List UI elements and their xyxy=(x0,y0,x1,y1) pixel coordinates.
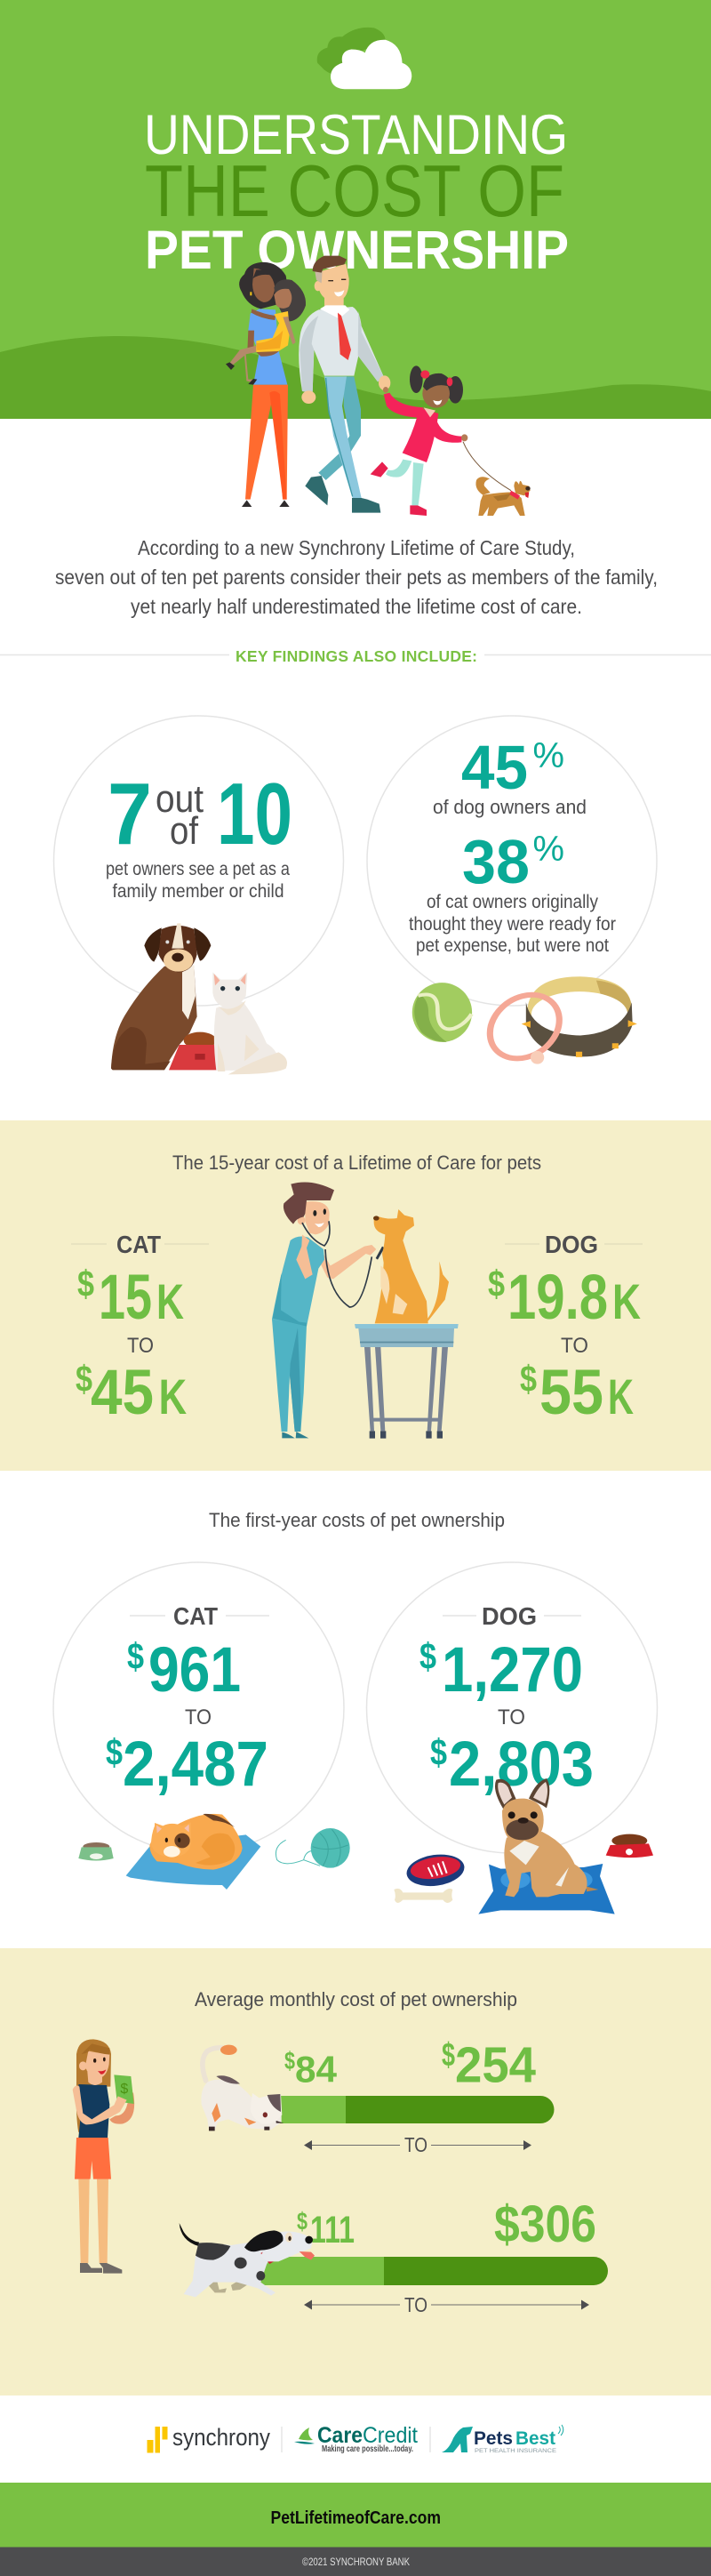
statistic: of xyxy=(170,809,199,853)
dog costs: TO xyxy=(561,1334,588,1358)
panel: first-year costs xyxy=(53,1509,658,1914)
illustration: family walking dog xyxy=(226,256,531,516)
illustration: french bulldog on cushion with toys xyxy=(394,1778,653,1914)
dog first-year circle: DOG xyxy=(482,1602,537,1630)
cat costs xyxy=(71,1231,209,1428)
vet xyxy=(272,1182,385,1438)
hill xyxy=(0,336,711,419)
dog costs: $ xyxy=(488,1263,505,1304)
girl running xyxy=(371,365,467,516)
dog costs: 55 xyxy=(539,1358,603,1428)
dog first-year circle: $ xyxy=(430,1731,447,1773)
heading: The first-year costs of pet ownership xyxy=(209,1509,505,1531)
cat prices: 254 xyxy=(455,2036,536,2093)
illustration: stretching cat xyxy=(201,2045,284,2131)
heading: The 15-year cost of a Lifetime of Care for pets xyxy=(172,1152,541,1174)
statistic: 38 percent: 38 xyxy=(462,827,530,896)
dog costs: K xyxy=(608,1368,634,1424)
statistic xyxy=(108,765,292,863)
dog prices: $306 xyxy=(494,2195,596,2253)
logo: carecredit: Credit xyxy=(363,2423,418,2448)
panel: 45% and 38% xyxy=(367,716,657,1070)
panel: 15-year cost xyxy=(0,1120,711,1471)
logo: synchrony xyxy=(148,2424,270,2452)
copyright bar: ©2021 SYNCHRONY BANK xyxy=(302,2556,410,2568)
dog first-year circle: TO xyxy=(498,1705,525,1729)
logo: carecredit: Care xyxy=(317,2423,363,2448)
cat costs: $ xyxy=(77,1263,94,1304)
statistic: out xyxy=(156,777,204,821)
dog on table xyxy=(373,1209,449,1323)
statistic: 7 xyxy=(108,765,152,863)
statistic: 38 percent: % xyxy=(533,830,564,869)
dog costs xyxy=(488,1231,643,1428)
caption: cat owners: thought they were ready for xyxy=(409,914,616,935)
logo: carecredit xyxy=(294,2423,418,2454)
dog bar xyxy=(260,2257,608,2285)
dog costs: DOG xyxy=(545,1231,598,1258)
logo: synchrony: synchrony xyxy=(172,2424,270,2451)
logo: pets best: Best xyxy=(515,2428,555,2449)
footer band: PetLifetimeofCare.com xyxy=(270,2508,441,2528)
logos xyxy=(148,2423,563,2454)
exam table xyxy=(355,1324,459,1439)
logo: pets best: Pets xyxy=(474,2428,513,2449)
illustration: vet examining dog xyxy=(272,1182,459,1439)
icon: clouds xyxy=(317,28,411,89)
intro paragraph: According to a new Synchrony Lifetime of Care Study, xyxy=(138,536,575,559)
cat first-year circle xyxy=(53,1562,344,1853)
dog costs: $ xyxy=(520,1358,537,1400)
cat range arrow xyxy=(304,2133,531,2156)
illustration: cat on cushion with bowl and yarn xyxy=(78,1814,350,1890)
footer band xyxy=(0,2483,711,2548)
dog range arrow xyxy=(304,2293,589,2316)
hero panel xyxy=(0,0,711,516)
small dog xyxy=(475,477,531,516)
cat costs: 15 xyxy=(99,1263,152,1333)
statistic: 45 percent xyxy=(461,733,564,802)
intro paragraph: seven out of ten pet parents consider their pets as members of the family, xyxy=(55,566,658,589)
caption: dog owners: of dog owners and xyxy=(433,796,587,818)
title: UNDERSTANDING xyxy=(144,104,568,166)
intro paragraph xyxy=(55,536,658,618)
statistic: 45 percent: % xyxy=(533,736,564,775)
dog first-year circle: $ xyxy=(419,1635,436,1677)
dog prices: 111 xyxy=(310,2209,355,2251)
cat range arrow: TO xyxy=(404,2133,427,2156)
cat first-year circle: 961 xyxy=(148,1635,241,1705)
title: THE COST OF xyxy=(145,149,564,232)
caption: family member or child xyxy=(112,881,284,902)
logo: carecredit: Making care possible...today. xyxy=(322,2444,413,2454)
caption: pet owners see a pet as a xyxy=(106,859,290,879)
cat prices: 84 xyxy=(295,2049,338,2090)
cat prices: $ xyxy=(442,2036,455,2073)
cat first-year circle: TO xyxy=(185,1705,212,1729)
intro paragraph: yet nearly half underestimated the lifetime cost of care. xyxy=(131,595,582,618)
heading: Average monthly cost of pet ownership xyxy=(195,1988,517,2010)
cat first-year circle: $ xyxy=(106,1731,123,1773)
statistic: 45 percent: 45 xyxy=(461,733,528,802)
cat costs: CAT xyxy=(116,1231,161,1258)
cat costs: K xyxy=(159,1368,187,1424)
title xyxy=(144,104,569,280)
dog range arrow: TO xyxy=(404,2293,427,2316)
dog first-year circle: 2,803 xyxy=(449,1729,594,1800)
dog first-year circle xyxy=(366,1562,658,1853)
cat costs: TO xyxy=(127,1334,154,1358)
dog prices: $ xyxy=(297,2207,308,2235)
dog first-year circle: 1,270 xyxy=(442,1635,583,1705)
statistic: 10 xyxy=(217,765,292,863)
copyright bar xyxy=(0,2547,711,2576)
key findings heading: KEY FINDINGS ALSO INCLUDE: xyxy=(236,647,477,665)
caption: cat owners: pet expense, but were not xyxy=(416,935,609,956)
caption: cat owners: of cat owners originally xyxy=(427,892,598,912)
illustration: dog and cat xyxy=(111,923,287,1074)
cat prices: $ xyxy=(284,2047,295,2074)
cat costs: $ xyxy=(76,1358,92,1400)
illustration: running dog xyxy=(180,2223,315,2297)
illustration: woman holding money: $ xyxy=(120,2082,128,2097)
logo: pets best: PET HEALTH INSURANCE xyxy=(475,2448,557,2454)
dog costs: K xyxy=(612,1273,641,1329)
logo: pets best xyxy=(442,2425,563,2454)
cat prices xyxy=(284,2036,536,2093)
illustration: tennis ball and collars xyxy=(412,976,637,1070)
cat costs: 45 xyxy=(91,1358,154,1428)
caption xyxy=(106,859,290,902)
dog prices xyxy=(297,2195,596,2253)
leash xyxy=(463,442,511,491)
cat costs: K xyxy=(156,1273,184,1329)
statistic: 38 percent xyxy=(462,827,564,896)
woman carrying child xyxy=(226,262,306,507)
dog costs: 19.8 xyxy=(507,1263,608,1333)
caption: cat owners xyxy=(409,892,616,956)
panel: monthly cost xyxy=(0,1948,711,2395)
cat first-year circle: CAT xyxy=(173,1602,218,1630)
title: PET OWNERSHIP xyxy=(145,220,569,280)
cat first-year circle: 2,487 xyxy=(123,1729,268,1800)
cat bar xyxy=(280,2096,555,2123)
illustration: woman holding money xyxy=(73,2039,134,2274)
panel: 7 out of 10 xyxy=(53,716,343,1074)
cat first-year circle: $ xyxy=(127,1635,144,1677)
man in shirt and tie xyxy=(299,256,390,513)
